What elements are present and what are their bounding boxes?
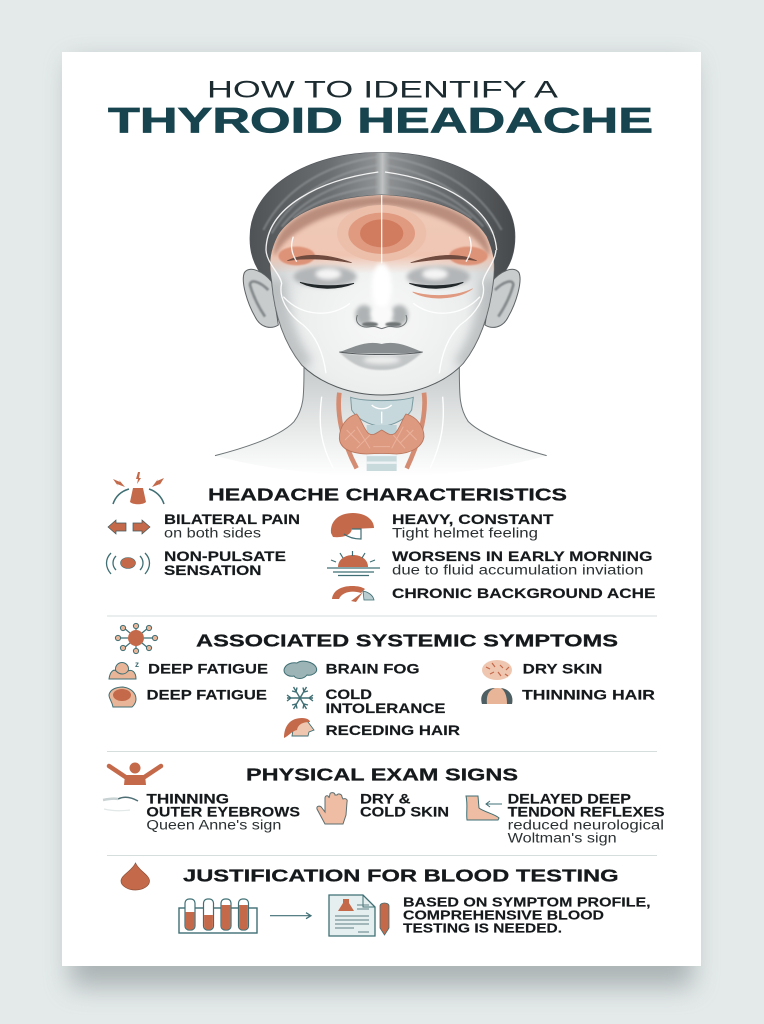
icon: sunrise: [327, 551, 380, 576]
icon: systemic burst: [115, 623, 158, 654]
item: delayed deep tendon reflexes: reduced neurological: [508, 817, 664, 832]
text: blood testing note: COMPREHENSIVE BLOOD: [403, 908, 604, 923]
eyelids: [293, 266, 470, 287]
icon: person with raised arms: [109, 762, 161, 785]
heading: PHYSICAL EXAM SIGNS: [246, 765, 518, 785]
text: blood testing note: [403, 895, 651, 935]
icon: gauge: [332, 586, 374, 602]
item: worsens in early morning: due to fluid accumulation inviation: [392, 562, 644, 578]
trachea: [367, 425, 397, 471]
icon: brain fog cloud: [284, 661, 317, 678]
text: blood testing note: TESTING IS NEEDED.: [403, 920, 562, 935]
item: worsens in early morning: [392, 549, 652, 578]
icon: dry skin: [482, 660, 512, 680]
nose: [355, 263, 408, 329]
item: deep fatigue: DEEP FATIGUE: [148, 662, 268, 677]
section: associated systemic symptoms: [109, 623, 655, 738]
item: thinning outer eyebrows: Queen Anne's sign: [146, 817, 281, 832]
section: headache characteristics: [106, 472, 656, 602]
item: heavy, constant: Tight helmet feeling: [392, 526, 538, 540]
item: dry and cold skin: COLD SKIN: [360, 805, 449, 820]
item: non-pulsate sensation: NON-PULSATE: [164, 549, 286, 564]
item: receding hair: RECEDING HAIR: [326, 723, 460, 738]
item: delayed deep tendon reflexes: Woltman's sign: [508, 830, 617, 845]
item: dry and cold skin: DRY &: [360, 791, 411, 806]
card shadow: [70, 62, 693, 987]
icon: blood drop: [121, 863, 150, 890]
item: cold intolerance: [326, 687, 446, 716]
face: [270, 195, 494, 395]
icon: thinning hair head: [481, 688, 512, 704]
title: THYROID HEADACHE: [108, 100, 653, 140]
item: cold intolerance: COLD: [326, 687, 372, 702]
eyebrows: [287, 255, 352, 263]
under-eye mark: [413, 289, 473, 298]
arrow: [270, 913, 311, 919]
ears: [243, 269, 520, 327]
item: thinning outer eyebrows: THINNING: [146, 791, 229, 806]
icon: test tubes in rack: [179, 899, 257, 933]
item: thinning outer eyebrows: OUTER EYEBROWS: [146, 805, 300, 820]
item: brain fog: BRAIN FOG: [326, 662, 420, 677]
item: heavy, constant: HEAVY, CONSTANT: [392, 512, 554, 527]
eyebrow pain zones: [278, 247, 488, 265]
title: HOW TO IDENTIFY A: [207, 76, 559, 104]
item: non-pulsate sensation: SENSATION: [164, 563, 262, 578]
icon: hand: [317, 793, 347, 824]
hair: [250, 153, 515, 287]
item: bilateral pain: [164, 512, 300, 540]
icon: receding hair profile: [284, 718, 314, 738]
icon: head with brain: [109, 687, 136, 707]
pain target: [337, 205, 426, 262]
icon: thinning eyebrow: [103, 797, 138, 811]
item: bilateral pain: on both sides: [164, 526, 261, 540]
item: chronic background ache: CHRONIC BACKGROUND ACHE: [392, 586, 656, 601]
text: blood testing note: BASED ON SYMPTOM PROFILE,: [403, 895, 651, 910]
item: worsens in early morning: WORSENS IN EARLY MORNING: [392, 549, 652, 564]
panel: card: [62, 52, 701, 966]
illustration: woman's face with thyroid: [215, 153, 547, 477]
title: [108, 76, 653, 140]
item: delayed deep tendon reflexes: TENDON REFLEXES: [508, 805, 665, 820]
item: bilateral pain: BILATERAL PAIN: [164, 512, 300, 527]
mouth: [339, 343, 423, 370]
item: delayed deep tendon reflexes: DELAYED DEEP: [508, 791, 631, 806]
item: thinning outer eyebrows: [146, 791, 300, 832]
item: delayed deep tendon reflexes: [508, 791, 665, 845]
larynx cartilage: [351, 397, 413, 427]
heading: JUSTIFICATION FOR BLOOD TESTING: [183, 866, 619, 886]
icon: helmet: [331, 513, 374, 539]
closed eyes: [300, 282, 463, 288]
icon: non-pulsate waves: [106, 553, 150, 574]
section: physical exam signs: [103, 762, 665, 845]
item: thinning hair: THINNING HAIR: [522, 688, 655, 703]
neck and shoulders: [215, 367, 547, 477]
white facial contour lines: [266, 172, 497, 373]
item: heavy, constant: [392, 512, 554, 540]
facial shading and forehead pain zone: [267, 195, 500, 367]
icon: foot reflex: [466, 796, 502, 820]
item: non-pulsate sensation: [164, 549, 286, 578]
icon: lab report and pen: [329, 895, 389, 936]
heading: ASSOCIATED SYSTEMIC SYMPTOMS: [196, 631, 618, 651]
icon: snowflake: [287, 687, 313, 709]
item: dry skin: DRY SKIN: [523, 662, 602, 677]
icon: tired person: [109, 660, 139, 679]
item: deep fatigue second: DEEP FATIGUE: [146, 688, 267, 703]
heading: HEADACHE CHARACTERISTICS: [208, 484, 567, 504]
item: dry and cold skin: [360, 791, 449, 820]
icon: bilateral arrows: [108, 520, 150, 534]
section: justification for blood testing: [121, 863, 651, 936]
icon: head with lightning: [113, 472, 164, 504]
side neck muscles: [339, 393, 425, 468]
icon: tired person: z: [135, 660, 139, 669]
thyroid gland: [339, 414, 424, 454]
item: cold intolerance: INTOLERANCE: [326, 701, 446, 716]
